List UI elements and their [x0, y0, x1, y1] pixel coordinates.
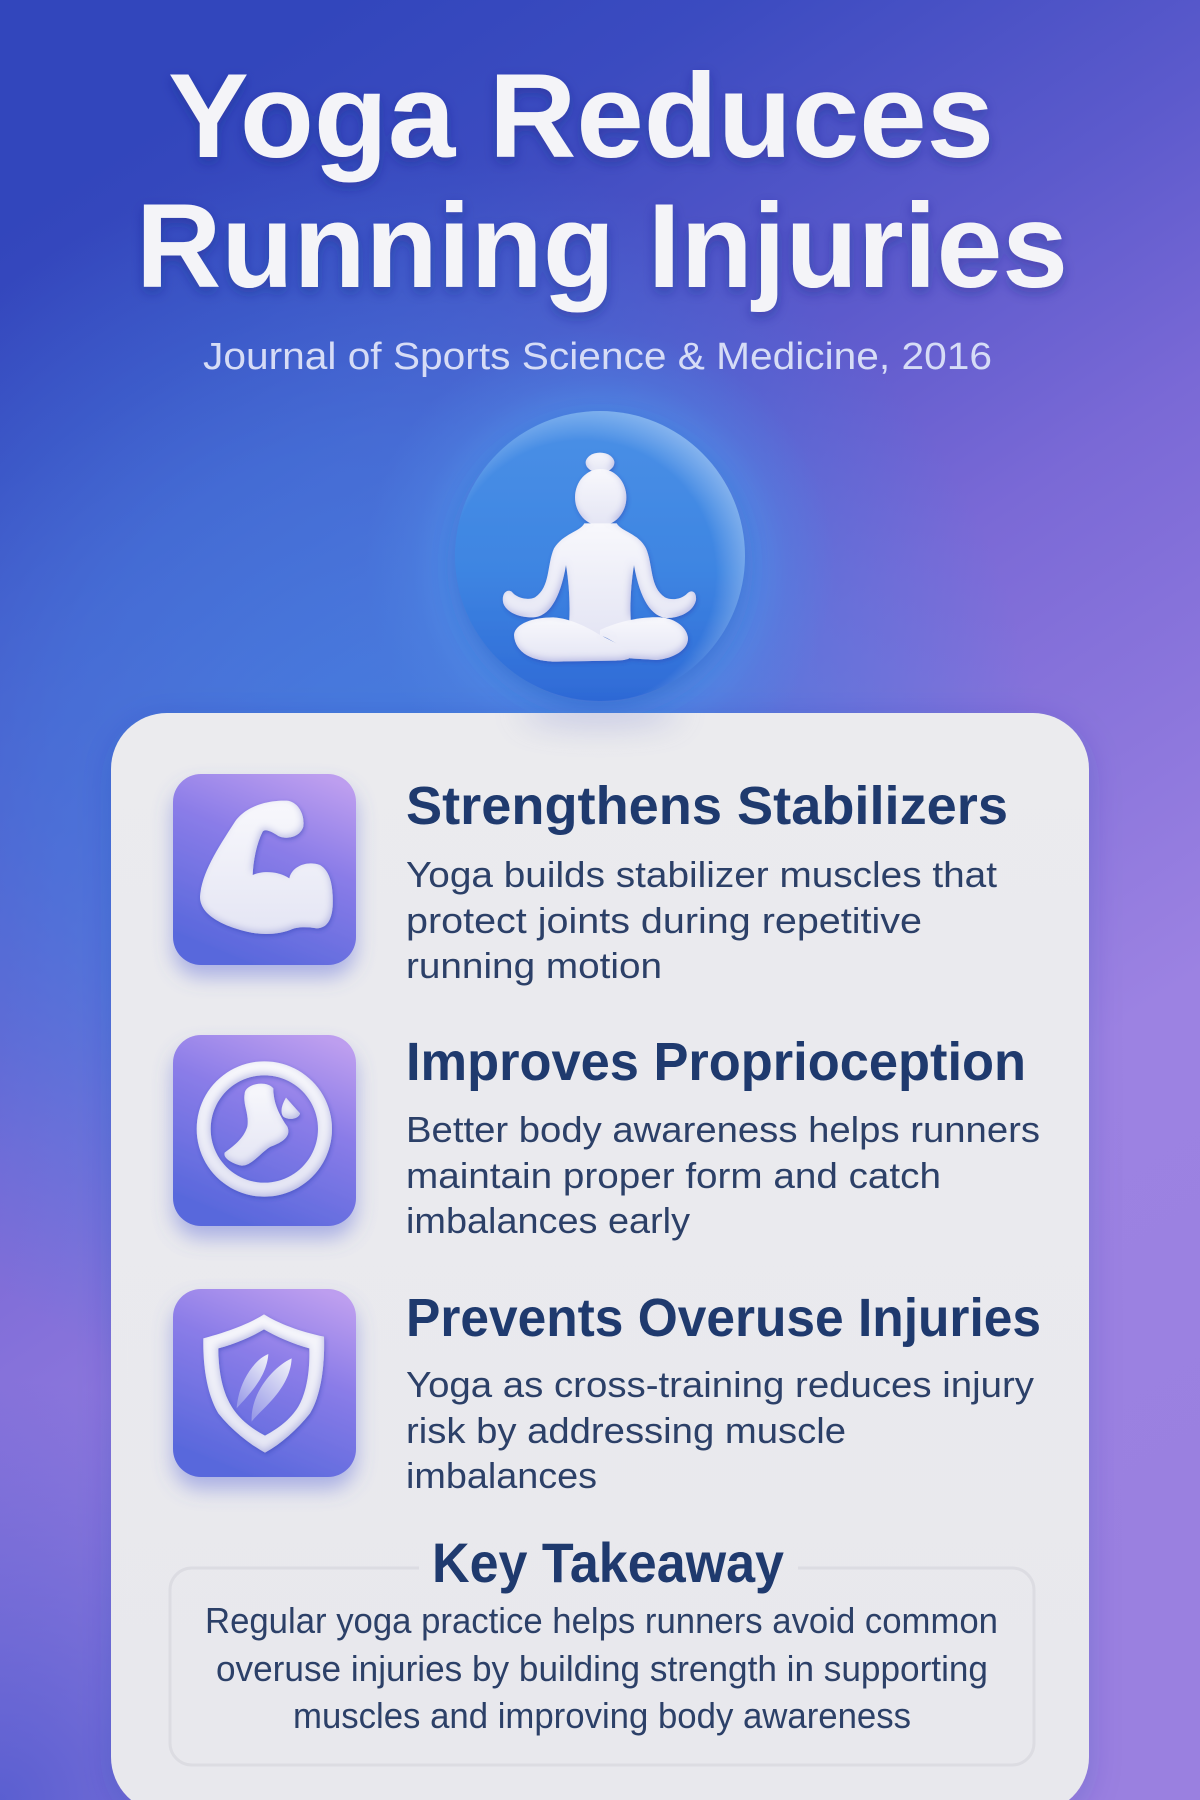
panel: benefits card	[111, 700, 1089, 1800]
callout: key takeaway	[170, 1531, 1034, 1765]
text block: improves proprioception	[406, 1032, 1040, 1241]
callout: key takeaway: muscles and improving body awareness	[293, 1695, 911, 1736]
text block: prevents overuse injuries	[406, 1288, 1041, 1496]
callout: key takeaway: overuse injuries by building strength in supporting	[216, 1648, 988, 1689]
title	[136, 49, 1068, 313]
text block: improves proprioception: Improves Proprioception	[406, 1032, 1026, 1092]
icon: yoga figure	[503, 453, 696, 662]
icon: flexed arm	[173, 774, 356, 965]
title: Yoga Reduces	[168, 49, 994, 183]
subtitle: source citation: Journal of Sports Science & Medicine, 2016	[203, 336, 992, 378]
callout: key takeaway: Key Takeaway	[432, 1531, 784, 1594]
text block: prevents overuse injuries: Prevents Overuse Injuries	[406, 1288, 1041, 1348]
icon: ankle in ring	[173, 1035, 356, 1226]
text block: strengthens stabilizers	[406, 776, 1008, 986]
text block: prevents overuse injuries: imbalances	[406, 1455, 597, 1496]
text block: improves proprioception: maintain proper form and catch	[406, 1155, 941, 1196]
text block: improves proprioception: imbalances early	[406, 1200, 690, 1241]
icon: shield with leaves	[173, 1289, 356, 1477]
callout: key takeaway: Regular yoga practice helps runners avoid common	[205, 1600, 998, 1641]
text block: strengthens stabilizers: Strengthens Stabilizers	[406, 776, 1008, 836]
title: Running Injuries	[136, 179, 1068, 313]
text block: improves proprioception: Better body awareness helps runners	[406, 1109, 1040, 1150]
text block: strengthens stabilizers: Yoga builds stabilizer muscles that	[406, 854, 997, 895]
hero badge: meditating figure	[455, 411, 745, 701]
text block: prevents overuse injuries: risk by addressing muscle	[406, 1410, 846, 1451]
text block: prevents overuse injuries: Yoga as cross-training reduces injury	[406, 1364, 1034, 1405]
text block: strengthens stabilizers: protect joints during repetitive	[406, 900, 922, 941]
text block: strengthens stabilizers: running motion	[406, 945, 662, 986]
